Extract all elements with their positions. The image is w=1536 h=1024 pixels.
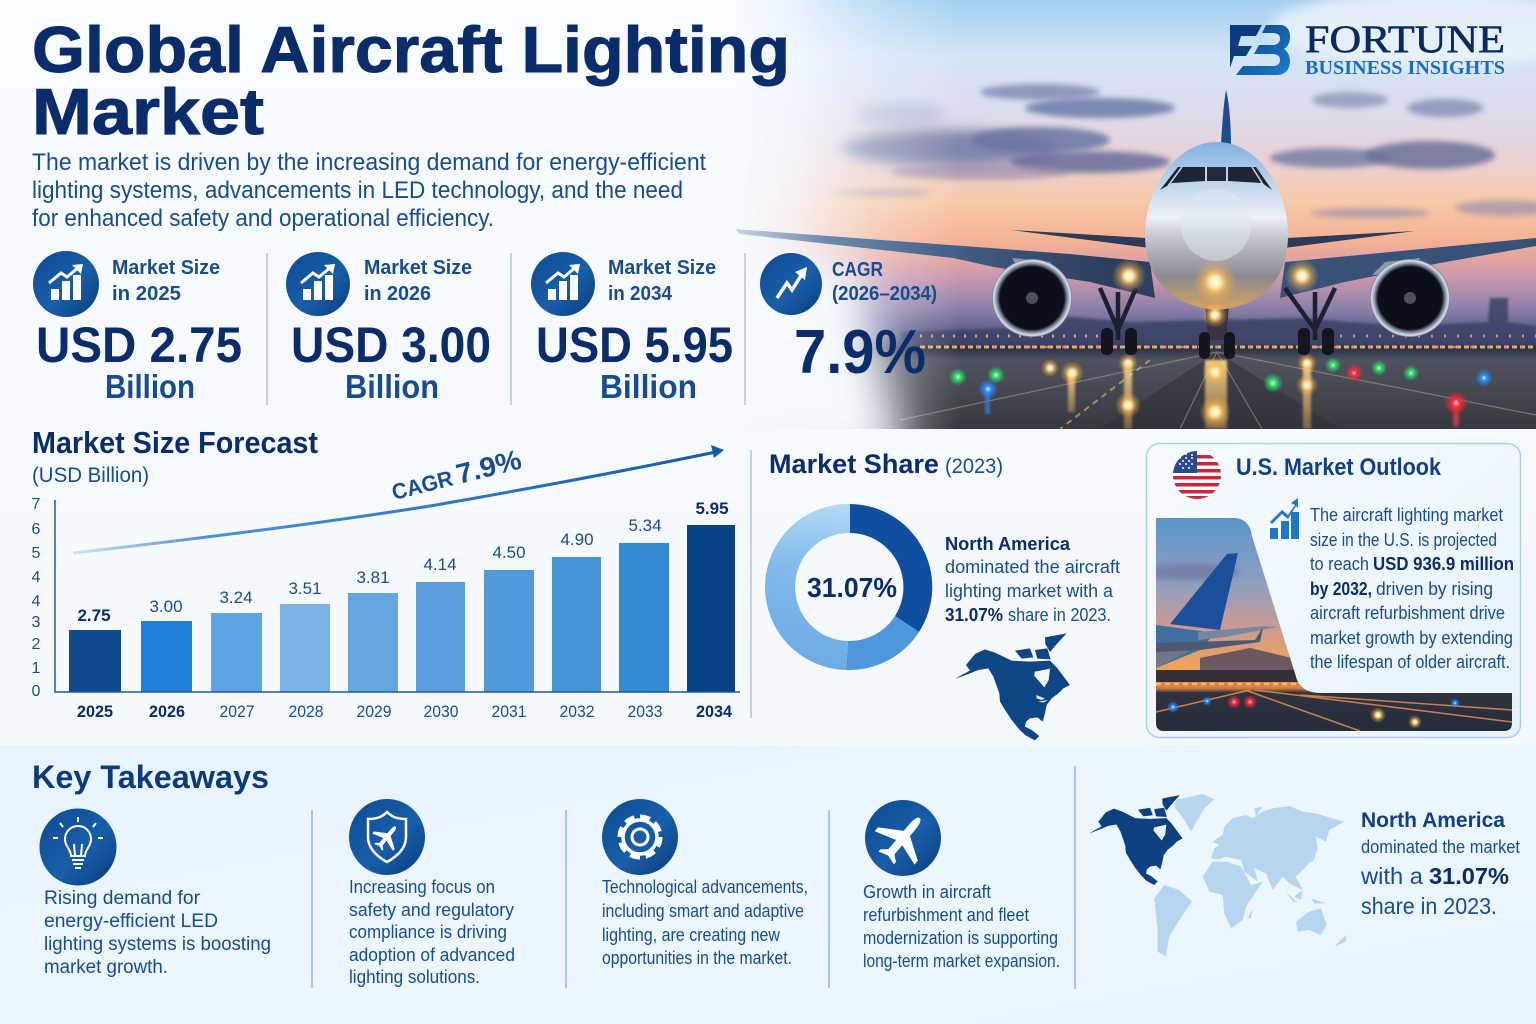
bar chart: market size forecast: 4.50: [492, 543, 526, 562]
bar chart: market size forecast: 2031: [492, 702, 526, 721]
bar chart: market size forecast: 2025: [77, 702, 113, 721]
heading: key takeaways: Key Takeaways: [32, 759, 269, 795]
text: US outlook description: the lifespan of older aircraft.: [1310, 652, 1510, 672]
panel: U.S. market outlook: U.S. Market Outlook: [1236, 454, 1442, 481]
icon: growth chart: [286, 252, 350, 316]
panel: U.S. market outlook: [1140, 444, 1520, 738]
text: North America share: [945, 534, 1120, 625]
heading: market size forecast: [32, 425, 318, 487]
text: North America share: lighting market with a: [945, 581, 1114, 601]
stat: market size 2025: Billion: [105, 368, 195, 405]
takeaway: technology: [602, 799, 808, 968]
arrow: CAGR growth curve: 7.9%: [453, 444, 525, 490]
text: US outlook description: aircraft refurbishment drive: [1310, 603, 1505, 623]
stat: CAGR: 7.9%: [794, 318, 926, 387]
stat: CAGR: (2026–2034): [832, 283, 937, 305]
subtitle text: for enhanced safety and operational efficiency.: [32, 205, 494, 232]
takeaway: LED demand: Rising demand for: [44, 888, 201, 909]
bar chart: market size forecast: 6: [32, 521, 41, 538]
text: North America callout: dominated the market: [1361, 837, 1520, 857]
hero photo: aircraft on runway at sunset: [700, 0, 1536, 429]
stat: market size 2034: Market Size: [608, 257, 716, 279]
bar chart: market size forecast: 4: [32, 569, 41, 586]
bar chart: market size forecast: 4: [32, 593, 41, 610]
bar chart: market size forecast: 4.14: [423, 555, 457, 574]
stat: market size 2034: in 2034: [608, 283, 673, 305]
subtitle text: The market is driven by the increasing demand for energy-efficient: [32, 149, 706, 176]
icon: airplane: [865, 800, 941, 876]
bar chart: market size forecast: 2032: [560, 702, 594, 721]
text: North America share: dominated the aircraft: [945, 557, 1120, 577]
takeaway: refurbishment: modernization is supporting: [863, 928, 1058, 948]
takeaway: technology: Technological advancements,: [602, 877, 808, 897]
text: US outlook description: size in the U.S. is projected: [1310, 530, 1497, 550]
stat: CAGR: CAGR: [832, 259, 883, 281]
stat: market size 2025: USD 2.75: [36, 317, 242, 373]
takeaway: safety and compliance: lighting solutions.: [349, 967, 480, 987]
takeaway: refurbishment: refurbishment and fleet: [863, 905, 1029, 925]
logo: Fortune Business Insights: BUSINESS INSIGHTS: [1305, 57, 1505, 79]
stat: CAGR: [760, 253, 937, 387]
bar chart: market size forecast: 3.81: [356, 568, 390, 587]
bar chart: market size forecast: 2029: [356, 702, 392, 721]
icon: US flag: [1173, 451, 1221, 500]
text: US outlook description: [1310, 505, 1514, 672]
bar chart: market size forecast: 2033: [628, 702, 662, 721]
bar chart: market size forecast: 2027: [220, 702, 254, 721]
takeaway: refurbishment: Growth in aircraft: [863, 882, 991, 902]
stat: market size 2026: USD 3.00: [291, 317, 491, 373]
icon: growth chart: [1270, 498, 1299, 539]
takeaway: safety and compliance: compliance is driving: [349, 922, 507, 942]
arrow: CAGR growth curve: CAGR: [389, 466, 455, 505]
bar chart: market size forecast: 4.90: [560, 530, 594, 549]
text: US outlook description: by 2032,: [1310, 579, 1372, 599]
donut chart: market share: 31.07%: [807, 572, 897, 603]
subtitle text: lighting systems, advancements in LED technology, and the need: [32, 177, 683, 204]
stat: market size 2026: Market Size: [364, 257, 472, 279]
takeaway: safety and compliance: Increasing focus on: [349, 877, 495, 897]
panel: key takeaways band: [0, 745, 1536, 1024]
bar chart: market size forecast: 2034: [696, 702, 733, 721]
bar chart: market size forecast: 3.24: [219, 588, 253, 607]
bar chart: market size forecast: 2.75: [77, 606, 111, 625]
text: North America callout: [1360, 809, 1520, 919]
takeaway: safety and compliance: adoption of advanced: [349, 945, 515, 965]
takeaway: safety and compliance: safety and regulatory: [349, 900, 514, 920]
bar chart: market size forecast: 2028: [288, 702, 324, 721]
heading: market size forecast: Market Size Forecast: [32, 425, 318, 460]
title: [32, 13, 790, 148]
bar chart: market size forecast: 3.00: [149, 597, 183, 616]
text: US outlook description: USD 936.9 million: [1373, 554, 1514, 574]
title: Global Aircraft Lighting: [32, 13, 790, 86]
photo: aircraft tail at sunset: [1140, 518, 1512, 731]
arrow: CAGR growth curve: [73, 444, 724, 553]
map: North America: [955, 633, 1070, 740]
text: North America callout: with a: [1360, 863, 1423, 889]
stat: market size 2025: Market Size: [112, 257, 220, 279]
bar chart: market size forecast: 5.95: [695, 499, 729, 518]
text: US outlook description: The aircraft lighting market: [1310, 505, 1503, 525]
heading: market share: (2023): [945, 455, 1003, 478]
bar chart: market size forecast: 1: [32, 660, 41, 677]
stat: market size 2026: in 2026: [364, 283, 431, 305]
heading: market size forecast: (USD Billion): [32, 464, 149, 487]
bar chart: market size forecast: 3.51: [288, 579, 322, 598]
bar chart: market size forecast: 5.34: [628, 516, 662, 535]
takeaway: technology: including smart and adaptive: [602, 901, 804, 921]
takeaway: refurbishment: [863, 800, 1060, 971]
stat: market size 2026: [286, 252, 491, 405]
bar chart: market size forecast: 2030: [424, 702, 458, 721]
bar chart: market size forecast: 5: [32, 545, 41, 562]
map: world with North America highlighted: [1089, 794, 1346, 957]
bar chart: market size forecast: 0: [32, 683, 41, 700]
takeaway: technology: opportunities in the market.: [602, 948, 792, 968]
takeaway: LED demand: market growth.: [44, 957, 168, 978]
logo: Fortune Business Insights: [1230, 18, 1505, 79]
icon: shield with plane: [349, 799, 425, 875]
text: North America share: North America: [945, 534, 1071, 554]
bar chart: market size forecast: 2026: [149, 702, 185, 721]
takeaway: refurbishment: long-term market expansion.: [863, 951, 1060, 971]
bar chart: market size forecast: 2: [32, 636, 41, 653]
takeaway: safety and compliance: [349, 799, 515, 987]
takeaway: technology: lighting, are creating new: [602, 925, 781, 945]
stat: market size 2025: in 2025: [112, 283, 181, 305]
bar chart: market size forecast: [32, 496, 740, 721]
subtitle text: [32, 149, 706, 232]
takeaway: LED demand: lighting systems is boosting: [44, 934, 271, 955]
text: North America callout: 31.07%: [1429, 863, 1509, 889]
stat: market size 2034: Billion: [600, 368, 697, 405]
icon: rising arrow: [760, 253, 822, 315]
icon: growth chart: [531, 252, 595, 316]
text: North America callout: North America: [1361, 809, 1505, 832]
takeaway: LED demand: energy-efficient LED: [44, 911, 218, 932]
text: North America callout: share in 2023.: [1361, 893, 1497, 919]
donut chart: market share: [765, 504, 932, 670]
icon: light bulb: [40, 808, 116, 886]
stat: market size 2026: Billion: [345, 368, 439, 405]
text: US outlook description: driven by rising: [1376, 579, 1493, 599]
icon: growth chart: [33, 251, 99, 317]
stat: market size 2034: USD 5.95: [536, 317, 733, 373]
bar chart: market size forecast: 7: [32, 496, 41, 513]
stat: market size 2025: [33, 251, 242, 405]
bar chart: market size forecast: 3: [32, 614, 41, 631]
stat: market size 2034: [531, 252, 733, 405]
text: US outlook description: market growth by extending: [1310, 628, 1513, 648]
text: US outlook description: to reach: [1310, 554, 1369, 574]
text: North America share: share in 2023.: [1008, 605, 1111, 625]
takeaway: LED demand: [40, 808, 271, 978]
icon: gear: [602, 799, 678, 875]
text: North America share: 31.07%: [945, 605, 1003, 625]
title: Market: [32, 75, 264, 148]
heading: market share: Market Share: [769, 449, 939, 479]
logo: Fortune Business Insights: FORTUNE: [1305, 18, 1505, 61]
